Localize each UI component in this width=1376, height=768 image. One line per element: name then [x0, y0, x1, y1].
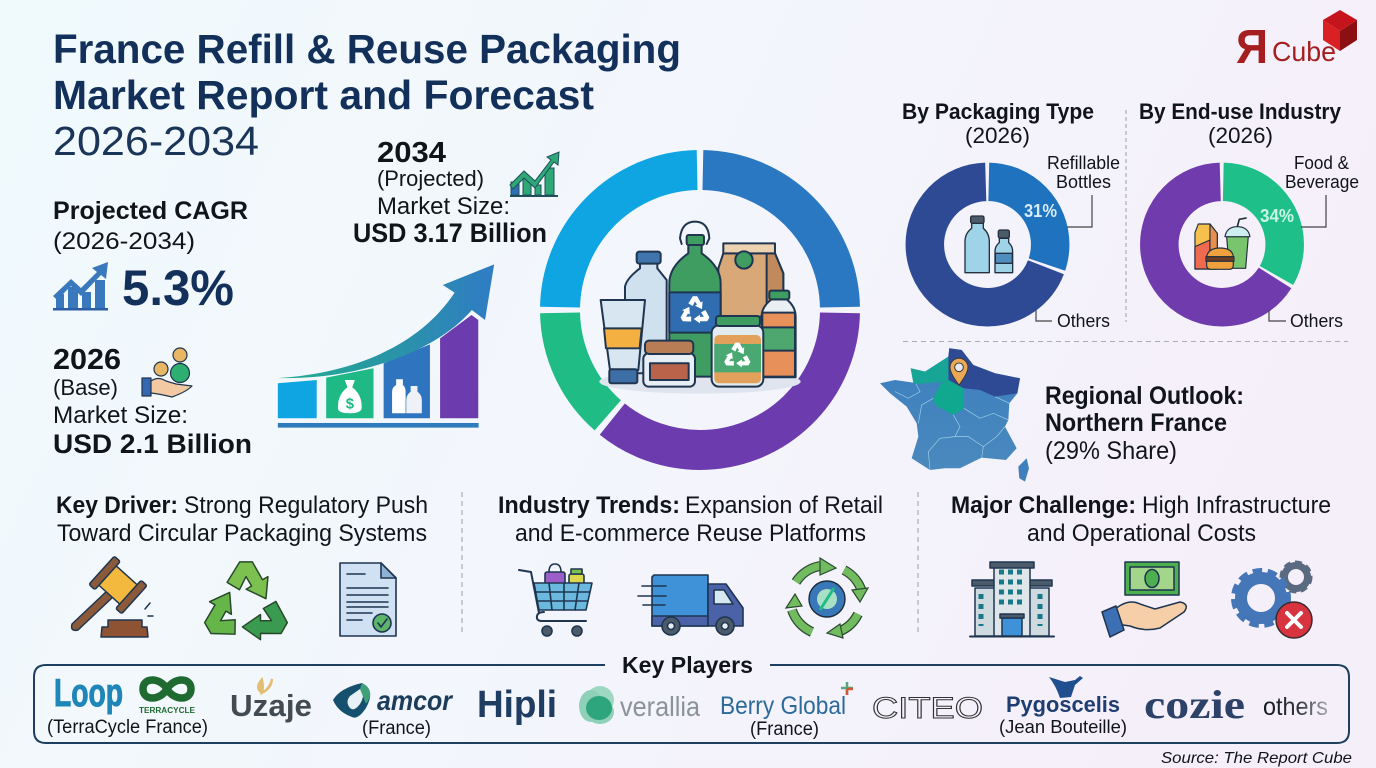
logo: TerraCycle: TERRACYCLE [139, 706, 196, 715]
tube [601, 300, 645, 383]
label: food and beverage: Food & [1294, 153, 1349, 173]
logo: Verallia: verallia [620, 691, 700, 722]
2034 projected market size: (Projected) [377, 166, 484, 191]
2026 base market size: 2026 [53, 344, 121, 376]
panel: major challenge: Major Challenge: [951, 492, 1136, 519]
panel: by end-use industry: (2026) [1208, 123, 1273, 148]
2026 base market size [53, 344, 252, 459]
logo: Cozie: cozie [1144, 682, 1245, 727]
Ile-de-France centre [933, 380, 964, 415]
label: refillable bottles [1047, 153, 1120, 227]
logo: Berry Global: Berry Global [720, 692, 846, 720]
label: others: Others [1290, 311, 1343, 331]
clear bottle [625, 252, 667, 373]
logo: amcor: amcor [377, 685, 454, 716]
panel: key driver: Key Driver: [56, 492, 178, 519]
donut chart: end-use industry [1159, 182, 1285, 307]
panel: by packaging type: By Packaging Type [902, 99, 1094, 124]
logo: Citeo: CITEO [872, 692, 983, 725]
panel: by end-use industry: By End-use Industry [1139, 99, 1342, 124]
icon: document [340, 563, 396, 636]
icon: hand with coins [142, 348, 192, 397]
logo: Loop: Loop [54, 672, 123, 715]
panel: major challenge [951, 492, 1331, 638]
title: France Refill & Reuse Packaging [53, 26, 681, 72]
panel: by end-use industry: 34% [1260, 206, 1294, 226]
icon: bottles [965, 216, 1013, 273]
title [53, 26, 681, 164]
logo: Berry Global: (France) [750, 719, 819, 740]
icon: shopping cart [519, 564, 592, 636]
2034 projected market size: 2034 [377, 137, 446, 169]
panel: industry trends: and E-commerce Reuse Platforms [515, 520, 866, 547]
icon: office building [970, 562, 1054, 636]
logo: amcor: (France) [362, 718, 431, 739]
title: 2026-2034 [53, 118, 259, 164]
logo: Pygoscelis: Pygoscelis [1006, 692, 1120, 717]
bar 4 [440, 315, 478, 418]
2026 base market size: (Base) [53, 375, 118, 400]
label: refillable bottles: Bottles [1056, 172, 1111, 192]
arrow [279, 264, 494, 378]
panel: by packaging type [902, 99, 1120, 331]
bar 2 with money bag [326, 368, 373, 418]
panel: by end-use industry [1139, 99, 1359, 331]
icon: green growth chart [510, 152, 559, 197]
label: others [1036, 310, 1110, 331]
icon: growth chart [53, 262, 108, 310]
logo: Berry Global [720, 682, 853, 740]
logo: Hipli: Hipli [477, 684, 557, 726]
location pin [950, 358, 968, 385]
logo: TerraCycle [139, 680, 196, 715]
logo: others: others [1263, 693, 1328, 721]
large jar [712, 316, 763, 387]
icon: gavel [72, 556, 153, 637]
logo: Pygoscelis [999, 676, 1127, 737]
northern region [948, 348, 1020, 397]
icon: delivery truck [638, 575, 743, 635]
Normandy [911, 357, 948, 384]
2034 projected market size [353, 137, 559, 248]
map: France regional outlook [880, 348, 1029, 482]
panel: major challenge: High Infrastructure [1142, 492, 1331, 519]
carton [718, 243, 783, 317]
CAGR block [53, 197, 248, 316]
2034 projected market size: USD 3.17 Billion [353, 218, 547, 248]
2026 base market size: Market Size: [53, 402, 188, 429]
logo: amcor [333, 683, 454, 739]
green bottle [669, 222, 721, 377]
icon: cash in hand [1102, 562, 1186, 637]
regional outlook text [1045, 382, 1244, 465]
panel: by packaging type: (2026) [965, 123, 1030, 148]
logo: RCube: Cube [1272, 36, 1336, 67]
regional outlook text: (29% Share) [1045, 437, 1177, 465]
heading: key players: Key Players [622, 652, 753, 678]
panel: key players box [34, 652, 1349, 743]
donut chart: packaging type [925, 182, 1050, 307]
panel: industry trends [498, 492, 883, 638]
central donut ring [560, 170, 840, 450]
bar 2 with money bag: $ [346, 396, 354, 412]
small orange bottle [762, 291, 796, 377]
label: food and beverage: Beverage [1285, 172, 1359, 192]
label: others [1269, 310, 1343, 331]
logo: RCube: Я [1236, 21, 1268, 74]
logo: Pygoscelis: (Jean Bouteille) [999, 717, 1127, 737]
label: refillable bottles: Refillable [1047, 153, 1120, 173]
label: food and beverage [1285, 153, 1359, 227]
icon: circular reuse arrows [786, 558, 868, 638]
panel: industry trends: Expansion of Retail [685, 492, 883, 519]
2034 projected market size: Market Size: [377, 193, 510, 220]
panel: key driver [56, 492, 428, 647]
logo: RCube [1236, 10, 1357, 74]
icon: gears with error mark [1235, 564, 1312, 638]
Corsica [1018, 458, 1029, 482]
CAGR block: (2026-2034) [53, 228, 195, 255]
icon: food and drink [1195, 218, 1250, 269]
panel: key driver: Strong Regulatory Push [184, 492, 428, 519]
icon: recycle [197, 562, 294, 647]
logo: Uzaje: Uzaje [230, 688, 312, 723]
bar 3 with bottles [384, 344, 430, 418]
base line [278, 423, 479, 428]
panel: industry trends: Industry Trends: [498, 492, 680, 519]
title: Market Report and Forecast [53, 72, 594, 118]
source note: Source: The Report Cube [1161, 750, 1352, 767]
panel: key driver: Toward Circular Packaging Systems [57, 520, 427, 547]
CAGR block: Projected CAGR [53, 197, 248, 225]
logo: Verallia [579, 686, 700, 724]
small jar [643, 341, 695, 387]
bar 1 [278, 380, 317, 418]
region borders [895, 384, 1009, 470]
panel: by packaging type: 31% [1024, 201, 1057, 221]
panel: major challenge: and Operational Costs [1027, 520, 1256, 547]
2026 base market size: USD 2.1 Billion [53, 429, 252, 459]
label: others: Others [1057, 311, 1110, 331]
regional outlook text: Northern France [1045, 409, 1227, 437]
central packaging illustration [599, 222, 801, 394]
CAGR block: 5.3% [122, 260, 234, 316]
label: TerraCycle France: (TerraCycle France) [47, 717, 208, 738]
growth bar chart with arrow [278, 264, 494, 428]
regional outlook text: Regional Outlook: [1045, 382, 1244, 410]
